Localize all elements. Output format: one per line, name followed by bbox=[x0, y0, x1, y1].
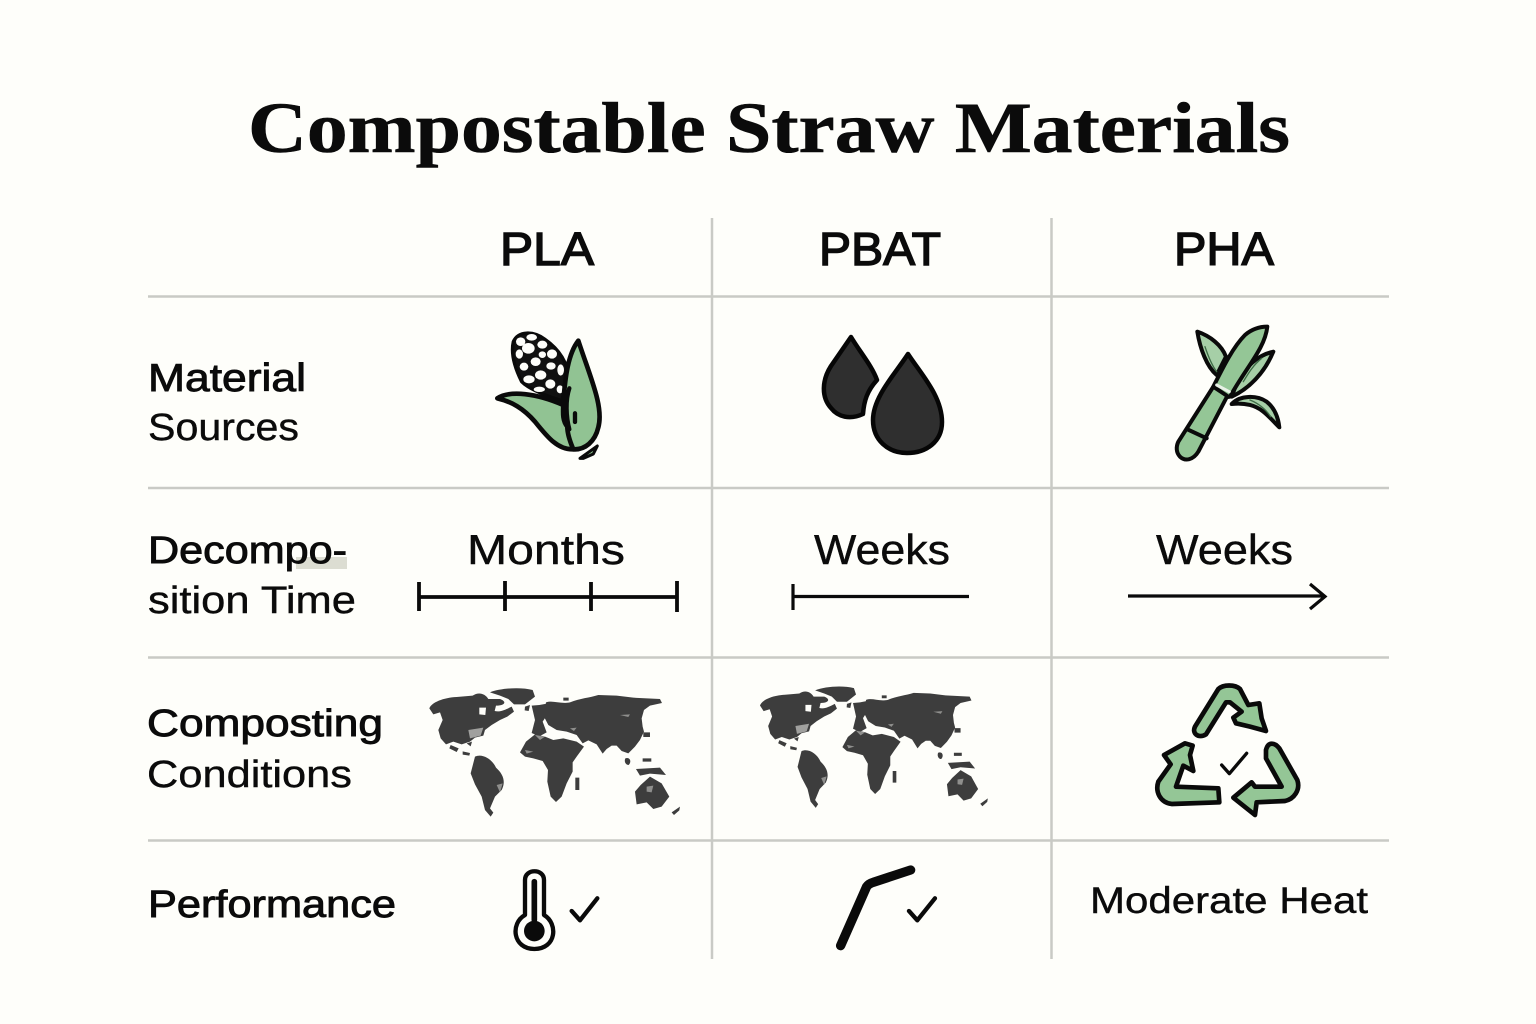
icon: world map (PBAT) bbox=[760, 686, 988, 808]
icon: bent straw with check bbox=[841, 870, 935, 946]
column header: PBAT: PBAT bbox=[819, 223, 941, 275]
arrow: weeks bbox=[1128, 584, 1325, 609]
column header: PHA: PHA bbox=[1174, 223, 1274, 275]
row label: Decomposition Time bbox=[148, 530, 356, 622]
label: Moderate Heat: Moderate Heat bbox=[1090, 880, 1369, 921]
icon: recycling symbol bbox=[1157, 685, 1298, 815]
label: Weeks (PBAT): Weeks bbox=[814, 526, 950, 573]
timeline: weeks scale bbox=[793, 584, 969, 610]
icon: sugarcane bbox=[1177, 327, 1279, 459]
row label: Decomposition Time: Decompo- bbox=[148, 530, 347, 572]
row label: Composting Conditions bbox=[147, 703, 383, 796]
label: Months: Months bbox=[467, 526, 625, 573]
timeline: months scale bbox=[418, 581, 677, 612]
title: Compostable Straw Materials bbox=[248, 88, 1290, 168]
column header: PLA: PLA bbox=[500, 223, 594, 275]
row label: Decomposition Time: sition Time bbox=[148, 580, 356, 622]
icon: oil drops bbox=[824, 337, 942, 453]
icon: thermometer with check bbox=[516, 871, 597, 949]
row label: Composting Conditions: Conditions bbox=[147, 754, 352, 796]
icon: world map (PLA) bbox=[429, 688, 680, 817]
row label: Material Sources: Sources bbox=[148, 407, 299, 449]
row label: Material Sources: Material bbox=[148, 357, 306, 400]
row label: Composting Conditions: Composting bbox=[147, 703, 383, 745]
row label: Material Sources bbox=[148, 357, 306, 449]
row label: Performance: Performance bbox=[148, 884, 396, 926]
icon: corn bbox=[497, 333, 600, 458]
label: Weeks (PHA): Weeks bbox=[1156, 526, 1293, 573]
